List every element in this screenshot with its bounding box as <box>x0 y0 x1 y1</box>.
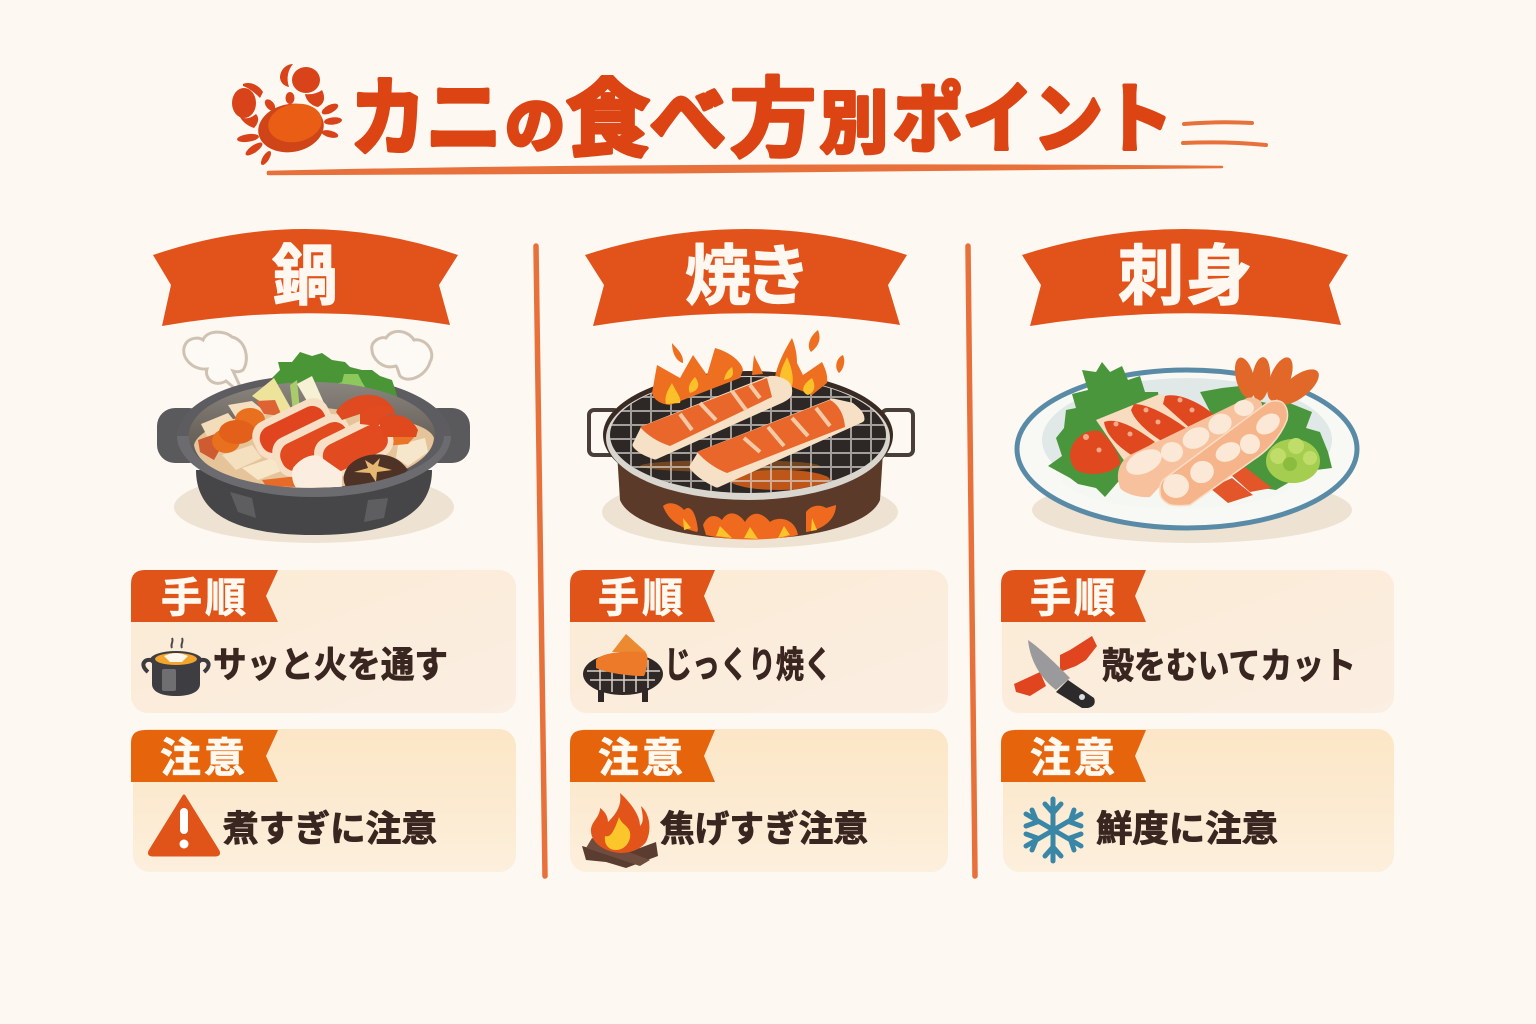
red sashimi <box>1070 394 1222 474</box>
crab meat <box>292 455 342 488</box>
dividers <box>536 246 975 876</box>
tag: 手順: 手順 <box>598 575 683 621</box>
icon: crab <box>232 64 342 166</box>
panel: 刺身 <box>1001 229 1394 872</box>
pot body <box>196 470 432 535</box>
title group <box>232 64 1266 174</box>
title text <box>350 71 1173 168</box>
wasabi <box>1266 438 1320 483</box>
tag: 手順 <box>1001 570 1146 622</box>
rim <box>177 375 451 497</box>
title text: ポイント <box>893 78 1173 163</box>
icon: pot <box>143 638 209 696</box>
card: 注意 <box>1001 729 1394 872</box>
crab chunk <box>212 408 265 453</box>
banner: 焼き: 焼き <box>685 239 811 313</box>
panel: 鍋 <box>131 229 516 872</box>
caution text: 焦げすぎ注意 <box>660 808 868 849</box>
title text: 食 <box>566 73 650 167</box>
banner: 鍋 <box>153 229 458 326</box>
illustration: crab hot pot <box>157 331 470 543</box>
icon: warning <box>149 796 219 855</box>
shiso left <box>1048 362 1160 497</box>
card: 手順 <box>131 570 516 713</box>
banner: 焼き <box>585 229 907 326</box>
icon: fire <box>582 793 658 868</box>
mushroom <box>344 454 408 487</box>
banner: 鍋: 鍋 <box>272 239 338 313</box>
rim front <box>177 436 451 497</box>
tofu and carrots <box>198 400 428 487</box>
card: 手順 <box>570 570 948 713</box>
flames on grill <box>652 330 844 405</box>
plate <box>1017 370 1357 528</box>
vegetables <box>252 378 293 416</box>
shiso right <box>1200 386 1332 490</box>
banner: 刺身 <box>1022 229 1348 326</box>
tag: 手順 <box>570 570 715 622</box>
red garnish <box>1210 467 1272 503</box>
title underline <box>268 166 1222 174</box>
step text: じっくり焼く <box>664 644 832 685</box>
brazier flames <box>663 503 836 540</box>
banner: 刺身: 刺身 <box>1118 239 1252 313</box>
title text: 方 <box>730 72 816 168</box>
caution text: 鮮度に注意 <box>1096 808 1278 849</box>
tag: 注意: 注意 <box>598 735 683 781</box>
tag: 注意 <box>1001 730 1146 782</box>
step text: 殻をむいてカット <box>1102 645 1356 686</box>
handles <box>157 408 207 463</box>
tail fan <box>1231 354 1324 411</box>
brazier <box>617 452 883 539</box>
greens <box>272 352 399 420</box>
grate <box>603 371 893 499</box>
illustration: crab on grill <box>589 330 913 548</box>
handles <box>589 410 619 455</box>
tag: 注意 <box>570 730 715 782</box>
card: 手順 <box>1001 570 1394 713</box>
title text: 別 <box>820 86 888 162</box>
crab legs <box>247 393 418 484</box>
illustration: crab sashimi plate <box>1017 354 1357 543</box>
tag: 注意: 注意 <box>160 735 245 781</box>
broth <box>189 382 435 488</box>
icon: small grill <box>583 634 663 702</box>
crab leg 1 <box>1118 397 1262 497</box>
tag: 手順 <box>131 570 278 622</box>
tag: 注意 <box>131 730 278 782</box>
card: 注意 <box>570 729 948 872</box>
icon: knife <box>1014 636 1097 708</box>
tag: 手順: 手順 <box>1030 575 1115 621</box>
title text: カニ <box>350 71 502 167</box>
tag: 注意: 注意 <box>1030 735 1115 781</box>
crab leg 2 <box>693 400 861 484</box>
speed lines <box>1183 122 1266 145</box>
title text: べ <box>650 79 726 164</box>
crab leg 1 <box>636 378 789 456</box>
step text: サッと火を通す <box>213 644 448 685</box>
crab leg 2 <box>1160 401 1288 506</box>
caution text: 煮すぎに注意 <box>223 808 437 849</box>
card: 注意 <box>131 729 516 872</box>
tag: 手順: 手順 <box>161 575 246 621</box>
panel: 焼き <box>570 229 948 872</box>
title text: の <box>505 93 565 160</box>
icon: snowflake <box>1026 799 1081 861</box>
steam <box>184 331 432 397</box>
